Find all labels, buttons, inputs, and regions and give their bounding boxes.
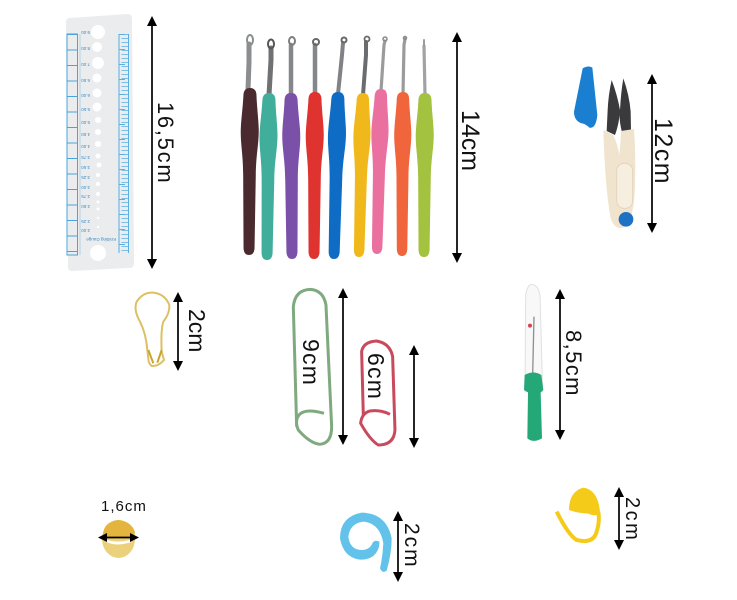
hook handle: green [415, 93, 434, 257]
panel: stitch holders [293, 288, 419, 448]
hook handle: blue [325, 92, 347, 259]
seam ripper drawing [524, 284, 543, 441]
panel: crochet hooks [240, 32, 484, 263]
red holder dimension arrow [409, 345, 419, 448]
green holder [293, 289, 332, 444]
hook handle: teal [258, 93, 278, 260]
panel: gold ring [98, 498, 147, 558]
handle recess [617, 163, 633, 208]
gauge size labels: 5.00 [81, 120, 90, 125]
hook handle: yellow [350, 93, 372, 257]
snips dimension arrow [647, 74, 657, 233]
hook handle: orange [393, 92, 412, 256]
green holder dimension label: 9cm [298, 339, 324, 386]
panel: yellow locking marker [557, 487, 643, 550]
hook handle: brown [240, 88, 259, 255]
green handle [524, 372, 543, 441]
marker head [569, 488, 600, 515]
gauge right ruler [119, 34, 128, 253]
panel: knitting gauge [66, 14, 178, 271]
gauge size labels: Knitting Gauge [86, 237, 116, 242]
gold pin dimension arrow [173, 292, 183, 371]
spiral dimension arrow [393, 511, 403, 582]
gauge left ruler [67, 34, 80, 255]
ring dimension label: 1,6cm [101, 498, 147, 515]
gauge size labels: 3.50 [81, 165, 90, 170]
gauge size labels: 3.75 [81, 155, 90, 160]
panel: gold bulb pin [136, 292, 210, 371]
red holder dimension label: 6cm [363, 353, 389, 400]
blue cap [574, 66, 597, 128]
cream handle [603, 129, 635, 228]
gauge size labels [81, 30, 116, 242]
gauge size labels: 6.50 [81, 78, 90, 83]
gauge size labels: 2.00 [81, 228, 90, 233]
marker dimension label: 2cm [621, 497, 643, 542]
gauge size labels: 3.25 [81, 175, 90, 180]
hooks dimension label: 14cm [456, 110, 484, 171]
hook handle: red [305, 92, 324, 259]
hook handle: purple [282, 93, 301, 259]
gauge size labels: 4.50 [81, 132, 90, 137]
gauge holes [90, 25, 106, 261]
gold pin dimension label: 2cm [184, 309, 210, 352]
gauge size labels: 4.00 [81, 144, 90, 149]
red holder [361, 341, 395, 445]
red tip [528, 324, 532, 328]
needle [533, 317, 534, 375]
gauge size labels: 6.00 [81, 93, 90, 98]
panel: blue spiral marker [340, 511, 423, 582]
blue button [619, 212, 633, 227]
hook shafts [247, 35, 425, 95]
seam ripper dimension arrow [555, 289, 565, 440]
marker dimension arrow [614, 487, 624, 550]
gauge size labels: 9.00 [81, 30, 90, 35]
snips drawing [574, 66, 635, 228]
gauge size labels: 2.25 [81, 219, 90, 224]
hook handle: pink [368, 89, 390, 254]
gauge size labels: 7.00 [81, 62, 90, 67]
blue spiral [340, 513, 392, 572]
gauge dimension arrow [147, 16, 157, 269]
marker wire [557, 512, 599, 541]
gauge size labels: 8.00 [81, 46, 90, 51]
ring dimension arrow [98, 533, 139, 542]
gauge size labels: 5.50 [81, 107, 90, 112]
gauge size labels: 2.75 [81, 194, 90, 199]
blades [607, 78, 631, 135]
gauge size labels: 3.00 [81, 185, 90, 190]
snips dimension label: 12cm [649, 118, 677, 185]
clear tube [525, 284, 543, 392]
ring [102, 520, 135, 558]
hooks dimension arrow [452, 32, 462, 263]
green holder dimension arrow [338, 288, 348, 445]
gauge dimension label: 16,5cm [153, 102, 178, 184]
gold pin [136, 293, 169, 366]
gauge body [66, 14, 134, 271]
seam ripper dimension label: 8,5cm [561, 330, 586, 397]
spiral dimension label: 2cm [400, 523, 423, 569]
panel: seam ripper [524, 284, 586, 441]
panel: thread snips [574, 66, 677, 233]
yellow marker [557, 488, 600, 541]
gauge size labels: 2.50 [81, 204, 90, 209]
